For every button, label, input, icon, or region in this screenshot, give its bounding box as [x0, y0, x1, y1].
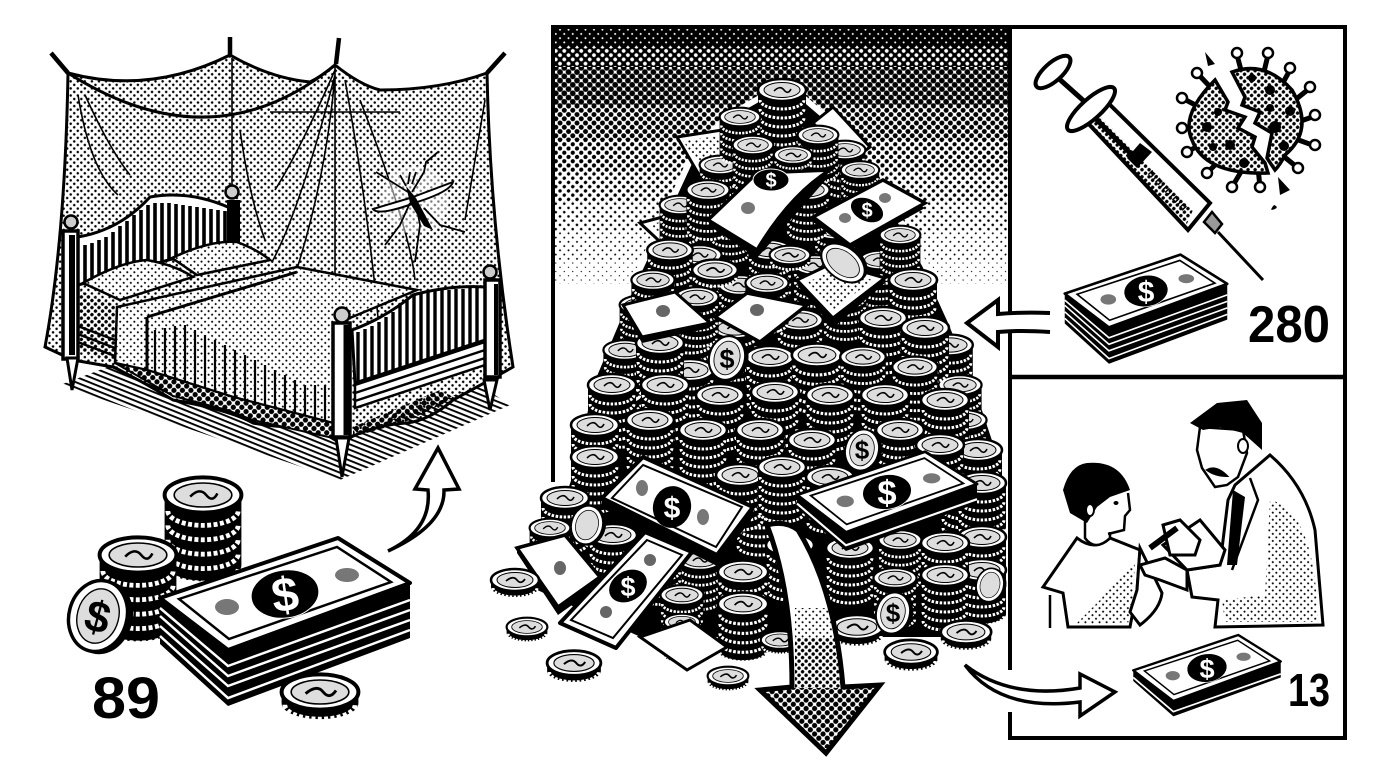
mosquito net canopy	[45, 37, 513, 443]
pile base	[530, 95, 1005, 640]
panel: child immunization	[1043, 400, 1330, 716]
arrow: vaccine funding to pile	[967, 300, 1050, 347]
upright coins: $	[855, 435, 870, 465]
banknotes on pile	[623, 169, 925, 343]
banknote stack	[1133, 635, 1281, 716]
loose coin	[282, 674, 358, 719]
panel: central frame with halftone sky	[551, 27, 1345, 738]
banknote lying left	[517, 535, 600, 615]
arrow: curved to immunization panel	[965, 665, 1115, 716]
icon: mosquito	[373, 152, 465, 262]
panel: vaccine	[1031, 48, 1330, 364]
coin stacks	[530, 79, 1006, 663]
back banknotes	[640, 107, 870, 253]
upright coin: $	[79, 591, 116, 644]
doctor	[1140, 400, 1323, 627]
banknote stack	[160, 538, 410, 706]
banknote stack: $	[268, 567, 302, 624]
filler coin stacks	[597, 141, 989, 610]
arrow: large downward share	[760, 523, 880, 753]
banknote slanted front: $	[620, 572, 636, 602]
upright coins	[567, 332, 1010, 639]
cluster: coins and banknotes	[61, 477, 410, 731]
illustration: bed under mosquito net	[45, 37, 515, 485]
banknote stack right: $	[877, 474, 897, 512]
banknote slanted front	[560, 532, 692, 648]
banknotes on pile: $	[765, 170, 777, 192]
icon: virus with crack	[1177, 48, 1320, 210]
footboard	[333, 266, 500, 477]
banknote stack	[1065, 255, 1227, 364]
upright coin	[61, 574, 141, 661]
bedspread	[115, 267, 455, 438]
value label: 13	[1288, 664, 1330, 716]
headboard	[63, 186, 240, 390]
banknote stack left: $	[664, 492, 681, 525]
scattered coins	[491, 569, 991, 690]
money pile	[491, 79, 1010, 690]
banknotes on pile: $	[861, 200, 873, 222]
banknote stack left	[602, 457, 753, 566]
banknote stack right	[797, 452, 977, 551]
floor hatching	[63, 365, 510, 480]
coin stack short	[100, 537, 176, 643]
coin stack tall	[165, 477, 241, 583]
child	[1043, 463, 1162, 628]
upright coins: $	[719, 344, 735, 374]
arrow: coins to bed	[388, 448, 459, 551]
banknote under	[640, 620, 727, 670]
upright coins: $	[886, 598, 901, 628]
syringe in hand	[1150, 528, 1177, 548]
banknote stack: $	[1138, 276, 1155, 309]
value label: 280	[1248, 296, 1330, 354]
icon: syringe	[1031, 51, 1263, 280]
banknote stack: $	[1199, 653, 1215, 684]
value label: 89	[92, 666, 160, 731]
pillows	[83, 242, 270, 300]
